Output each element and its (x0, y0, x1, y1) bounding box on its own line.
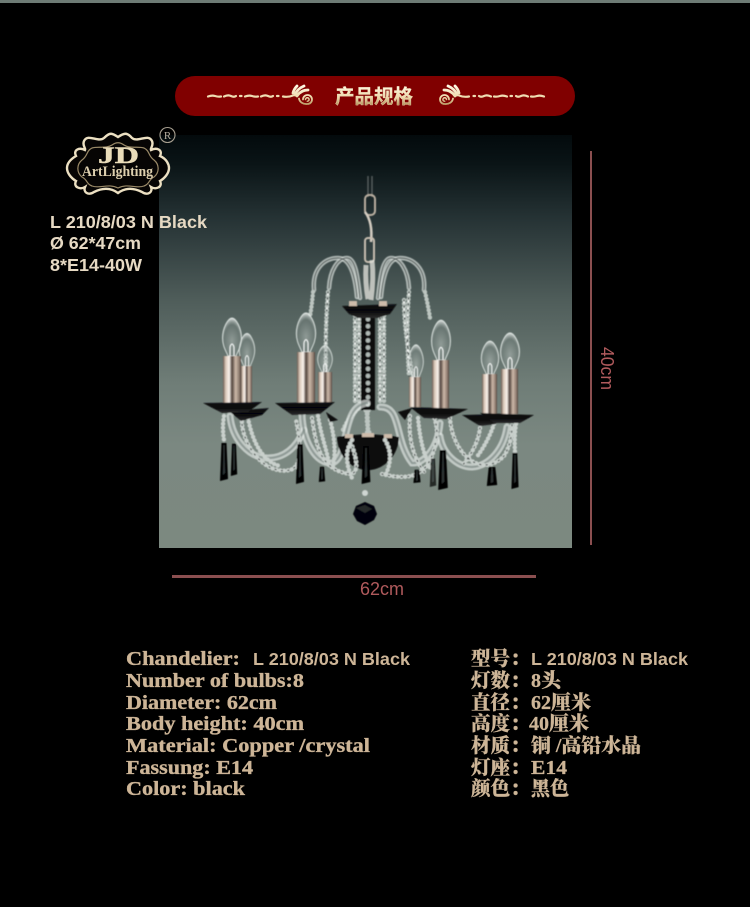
registered mark (160, 128, 175, 142)
Chinese specification list: 高度： (471, 712, 530, 735)
Chinese specification list: 型号： (471, 647, 530, 670)
model summary text: L 210/8/03 N Black (50, 212, 207, 232)
header title: 产品规格 (335, 86, 414, 108)
product photo: chandelier on gradient backdrop (159, 135, 572, 548)
glass arms (230, 403, 507, 467)
height label: 40cm (597, 347, 617, 390)
bottom pendant ball (353, 490, 377, 525)
Chinese specification list: 颜色： (471, 777, 530, 800)
model summary text (50, 212, 207, 275)
header ornament right (440, 86, 544, 104)
Chinese specification list: 8头 (531, 669, 564, 692)
Chinese specification list: 40厘米 (529, 712, 589, 735)
black bowl (337, 433, 399, 470)
Chinese specification list (470, 647, 688, 800)
English specification list: Body height: 40cm (126, 714, 304, 735)
English specification list: L 210/8/03 N Black (253, 649, 410, 669)
English specification list: Chandelier: (126, 649, 240, 670)
English specification list: Color: black (126, 779, 245, 800)
model summary text: Ø 62*47cm (50, 233, 141, 253)
Chinese specification list: 62厘米 (531, 691, 591, 714)
chandelier artwork (203, 176, 534, 525)
Chinese specification list: L 210/8/03 N Black (531, 649, 688, 669)
panel: product specification header (175, 76, 575, 116)
back candles (239, 333, 423, 407)
crystal swags (223, 416, 516, 478)
height dimension line (590, 151, 592, 545)
black crystal drops (220, 443, 519, 490)
Chinese specification list: 材质： (471, 734, 530, 757)
Chinese specification list: 灯数： (470, 669, 530, 692)
Chinese specification list: 灯座： (470, 757, 530, 779)
central black column (342, 301, 397, 410)
width dimension line (172, 575, 536, 578)
model summary text: 8*E14-40W (50, 255, 142, 275)
English specification list: Material: Copper /crystal (126, 736, 371, 757)
width label: 62cm (360, 579, 404, 599)
logo monogram: JD (98, 143, 139, 168)
header ornament left (208, 86, 312, 104)
Chinese specification list: 直径： (471, 691, 530, 714)
Chinese specification list: 黑色 (531, 777, 569, 800)
logo: JD ArtLighting (67, 134, 169, 194)
English specification list (126, 649, 410, 800)
front candles (222, 313, 520, 414)
registered mark: R (164, 130, 172, 142)
English specification list: Diameter: 62cm (126, 693, 277, 714)
chandelier chain (365, 176, 375, 300)
upper glass arcs (314, 258, 424, 298)
top edge strip (0, 0, 750, 3)
English specification list: Number of bulbs:8 (126, 671, 304, 692)
hanging crystal strands (310, 292, 430, 448)
Chinese specification list: E14 (531, 758, 567, 779)
black candle plates (203, 402, 534, 426)
Chinese specification list: 铜 /高铅水晶 (531, 734, 641, 757)
English specification list: Fassung: E14 (126, 758, 253, 779)
logo wordmark: ArtLighting (82, 164, 154, 180)
